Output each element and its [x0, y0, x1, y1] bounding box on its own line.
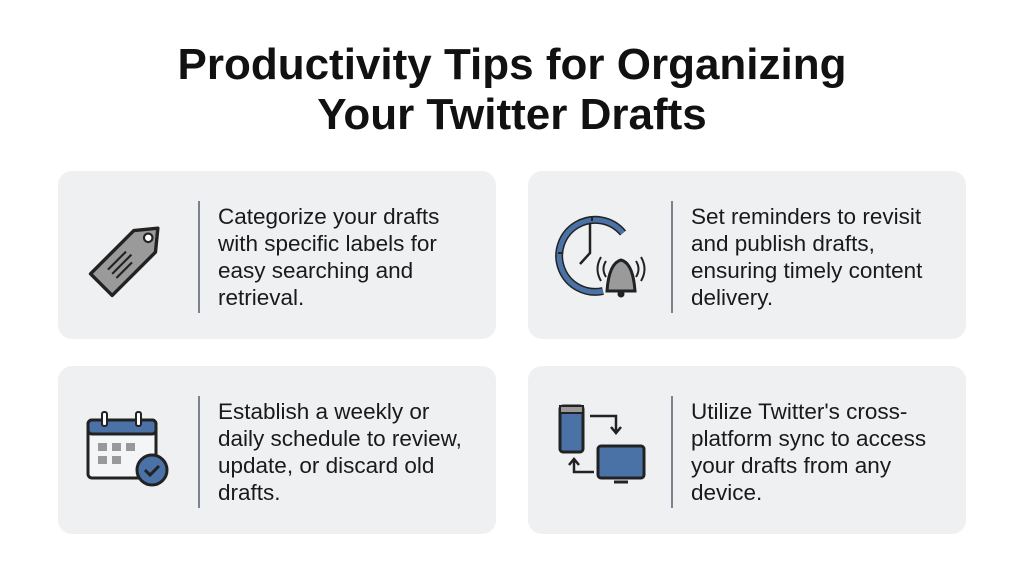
text: categorize: retrieval. [218, 285, 304, 310]
text: reminders [691, 204, 922, 310]
text: schedule: Establish a weekly or [218, 399, 429, 424]
title [177, 40, 847, 139]
text: reminders: Set reminders to revisit [691, 204, 921, 229]
text: sync: device. [691, 480, 762, 505]
text: sync [691, 399, 926, 505]
icon: tag [88, 226, 160, 298]
text: categorize [218, 204, 439, 310]
text: sync: Utilize Twitter's cross- [691, 399, 907, 424]
icon: devices sync [558, 404, 646, 484]
text: reminders: and publish drafts, [691, 231, 875, 256]
panel: categorize [58, 171, 496, 339]
text: schedule: daily schedule to review, [218, 426, 462, 451]
text: reminders: delivery. [691, 285, 773, 310]
title: Productivity Tips for Organizing [177, 40, 847, 89]
text: schedule: update, or discard old [218, 453, 434, 478]
text: sync: platform sync to access [691, 426, 926, 451]
icon: clock and bell [555, 216, 646, 298]
panel: sync [528, 366, 966, 534]
panel: reminders [528, 171, 966, 339]
title: Your Twitter Drafts [317, 90, 707, 139]
text: categorize: with specific labels for [218, 231, 437, 256]
text: reminders: ensuring timely content [691, 258, 922, 283]
text: schedule [218, 399, 462, 505]
icon: calendar [86, 411, 168, 486]
text: schedule: drafts. [218, 480, 281, 505]
panel: schedule [58, 366, 496, 534]
text: categorize: Categorize your drafts [218, 204, 439, 229]
text: categorize: easy searching and [218, 258, 413, 283]
text: sync: your drafts from any [691, 453, 891, 478]
